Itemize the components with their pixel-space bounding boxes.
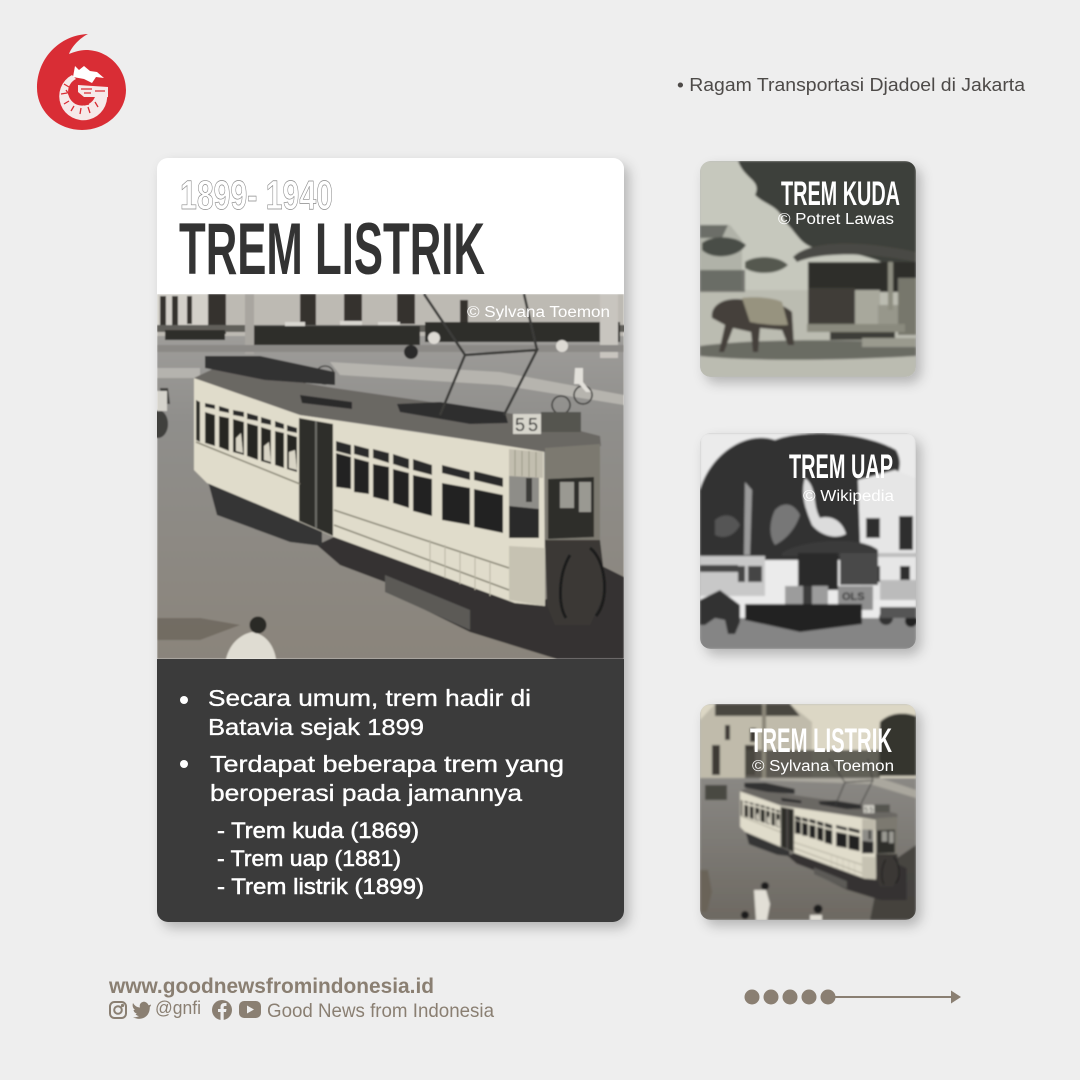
years outline: 1899- 1940 [180,172,333,218]
icon: twitter [133,1002,151,1019]
tram [194,294,624,659]
pagination arrow [744,990,961,1004]
tram list: - Trem kuda (1869) [217,818,419,843]
panel: electric tram thumbnail [700,704,916,920]
thumbnail title: TREM LISTRIK [750,722,892,760]
tram list [217,818,424,899]
bullet text 1: Secara umum, trem hadir di [208,685,531,711]
bullet text 1 [180,685,531,740]
footer: website and social [108,975,494,1022]
photo: electric tram [148,294,627,659]
bullet text 2: Terdapat beberapa trem yang [210,751,564,777]
tram: 5 [515,415,525,435]
tram: 5 [528,415,538,435]
website url: www.goodnewsfromindonesia.id [108,975,434,998]
logo: Good News from Indonesia [37,34,126,130]
heading block [179,172,485,290]
tram list: - Trem listrik (1899) [217,874,424,899]
icon: instagram [110,1002,126,1018]
thumbnail credit: © Potret Lawas [778,211,894,228]
panel: steam tram thumbnail [700,433,917,649]
thumbnail credit: © Sylvana Toemon [752,758,894,775]
icon: youtube [239,1001,261,1018]
title: TREM LISTRIK [179,209,485,290]
panel: description [157,659,624,922]
person in foreground [226,616,276,659]
thumbnail credit: © Wikipedia [803,488,894,505]
panel: steam tram thumbnail: OLS [842,591,865,603]
bullet text 1: Batavia sejak 1899 [208,714,424,740]
handle: @gnfi [155,998,201,1018]
panel: main card [148,158,627,922]
thumbnail title: TREM UAP [789,448,893,486]
panel: horse tram thumbnail [700,161,916,377]
thumbnail title: TREM KUDA [781,175,900,213]
bullet text 2 [180,751,564,806]
bullet text 2: beroperasi pada jamannya [210,780,522,806]
icon: facebook [212,1000,232,1020]
tram list: - Trem uap (1881) [217,846,401,871]
header series title: • Ragam Transportasi Djadoel di Jakarta [677,75,1026,95]
photo credit: © Sylvana Toemon [467,304,610,321]
channel name: Good News from Indonesia [267,1000,494,1022]
